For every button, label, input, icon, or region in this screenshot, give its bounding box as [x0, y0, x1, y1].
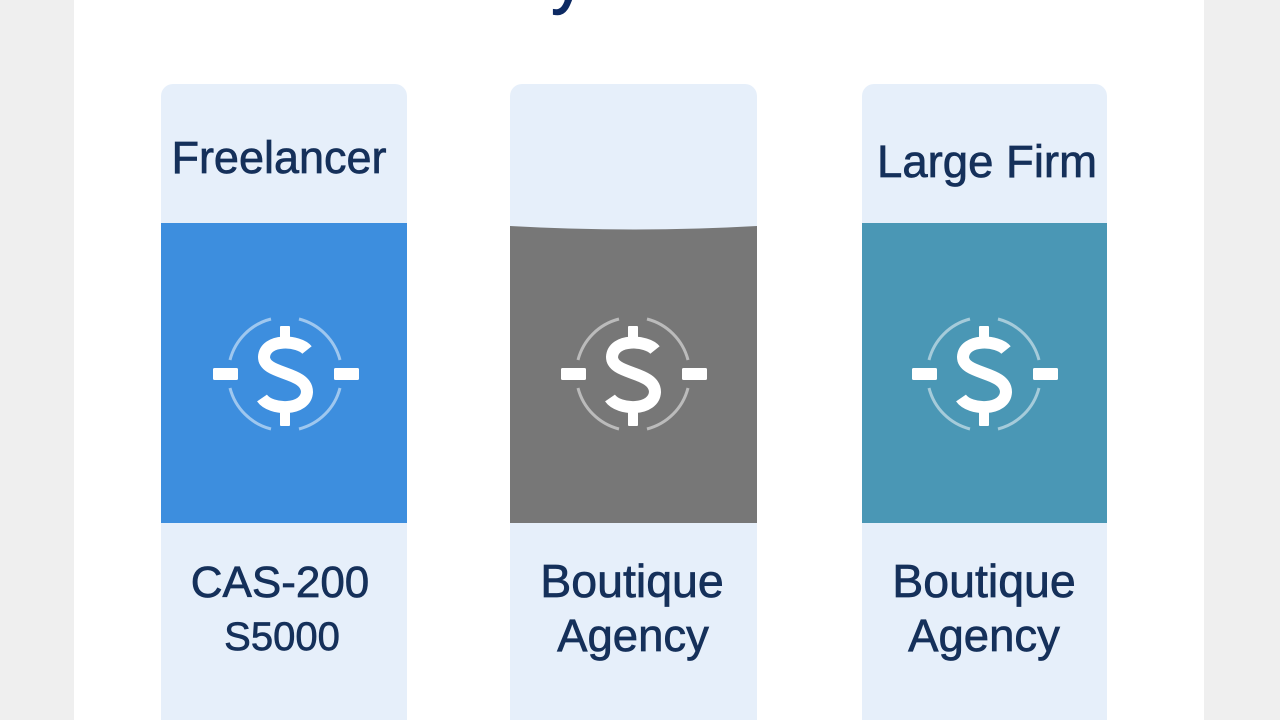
card background: boutique agency	[510, 84, 757, 720]
panel: large firm	[862, 84, 1107, 720]
price text: freelancer: CAS-200	[191, 558, 369, 607]
label: boutique agency duplicate	[892, 555, 1076, 661]
label: boutique agency duplicate: Agency	[908, 610, 1060, 661]
colour block: boutique agency	[510, 226, 757, 523]
price text: freelancer: S5000	[224, 615, 340, 659]
label: boutique agency duplicate: Boutique	[892, 555, 1076, 607]
label: boutique agency: Boutique	[540, 555, 724, 607]
card background: large firm	[862, 84, 1107, 720]
icon: dollar target blue	[213, 319, 359, 429]
colour block: large firm	[862, 223, 1107, 523]
label: boutique agency	[540, 555, 724, 661]
price text: freelancer	[191, 558, 369, 659]
panel: boutique agency	[510, 84, 757, 720]
panel: freelancer	[161, 84, 407, 720]
label: boutique agency: Agency	[557, 610, 709, 661]
icon: dollar target teal	[912, 319, 1058, 429]
heading: freelancer: Freelancer	[171, 132, 387, 183]
colour block: freelancer	[161, 223, 407, 523]
icon: dollar target grey	[561, 319, 707, 429]
heading: large firm: Large Firm	[877, 136, 1097, 187]
card background: freelancer	[161, 84, 407, 720]
